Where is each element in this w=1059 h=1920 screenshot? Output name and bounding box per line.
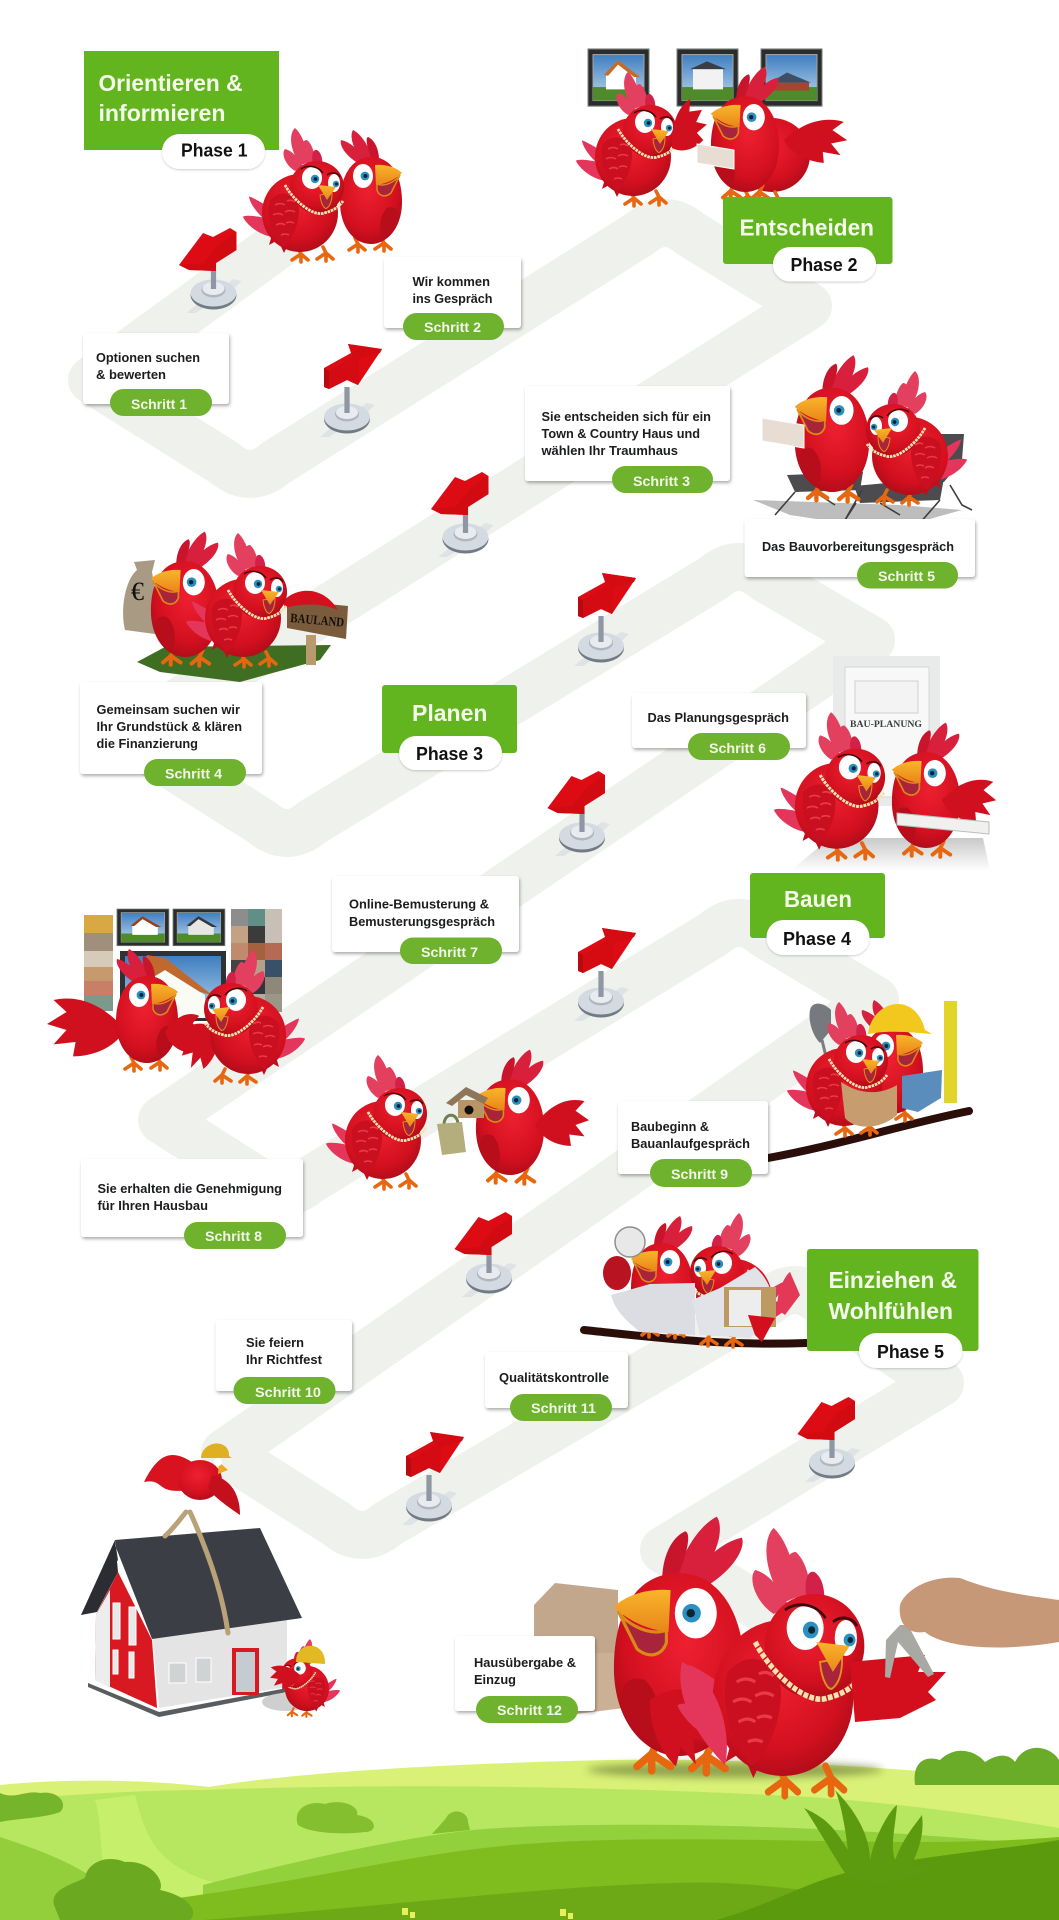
plan roll xyxy=(897,813,989,834)
door and birds xyxy=(774,656,998,871)
phase 5 header: Einziehen & xyxy=(828,1267,957,1293)
apron xyxy=(841,1082,897,1127)
step 6 card xyxy=(632,693,806,760)
phase pill: Phase 1 xyxy=(181,140,248,160)
sign 8 xyxy=(402,1432,464,1525)
step 2 card: Wir kommen xyxy=(412,274,490,289)
wing over sign xyxy=(284,591,338,610)
house photo frames xyxy=(588,49,822,106)
step 10 card: Ihr Richtfest xyxy=(246,1352,323,1367)
phase 2 header: Entscheiden xyxy=(740,214,874,240)
phase 5 header: Wohlfühlen xyxy=(828,1298,953,1324)
house roof xyxy=(81,1528,302,1639)
birds: phase 1 xyxy=(243,128,402,262)
phase 5 header xyxy=(807,1249,978,1368)
birds with money bag and Bauland sign xyxy=(123,532,348,682)
male bird xyxy=(614,1517,744,1773)
step 7 card: Online-Bemusterung & xyxy=(349,896,489,912)
tail xyxy=(777,1272,800,1315)
step 4 card: Schritt 4 xyxy=(165,766,223,782)
flowers xyxy=(402,1908,573,1919)
phase pill xyxy=(859,1333,962,1368)
birdhouse xyxy=(446,1087,488,1118)
money bag xyxy=(123,560,156,634)
phase pill: Phase 2 xyxy=(790,255,858,275)
phase pill: Phase 5 xyxy=(877,1342,944,1362)
step 12 card xyxy=(455,1636,595,1723)
sign 5 xyxy=(548,771,610,856)
grass tuft xyxy=(804,1790,936,1883)
sign xyxy=(306,635,316,665)
step 1 card xyxy=(83,333,229,416)
step 2 card: Schritt 2 xyxy=(424,320,481,335)
step 6 card: Schritt 6 xyxy=(709,741,767,756)
birds on chairs xyxy=(753,355,972,540)
house windows xyxy=(169,1658,211,1683)
step 8 card: für Ihren Hausbau xyxy=(98,1198,208,1213)
phase 2 header xyxy=(723,197,892,282)
step 2 card: ins Gespräch xyxy=(412,291,493,306)
step 11 card: Schritt 11 xyxy=(531,1401,597,1416)
step 3 card: Sie entscheiden sich für ein xyxy=(542,409,711,424)
shadow xyxy=(753,500,962,530)
step 9 card xyxy=(618,1101,768,1187)
step 3 card xyxy=(525,386,730,493)
step 12 card: Einzug xyxy=(474,1672,516,1687)
step 2 card xyxy=(384,257,521,340)
shovel xyxy=(809,1004,839,1111)
step 7 card: Schritt 7 xyxy=(421,945,478,960)
level xyxy=(944,1001,957,1103)
bush small xyxy=(432,1811,470,1834)
coats xyxy=(611,1283,695,1335)
door and birds: BAU-PLANUNG xyxy=(850,720,923,730)
material samples and birds xyxy=(47,909,305,1084)
step 3 card: wählen Ihr Traumhaus xyxy=(541,443,678,458)
phase pill xyxy=(773,247,876,282)
step 9 card: Schritt 9 xyxy=(671,1167,728,1182)
birds: phase 2 xyxy=(576,67,849,206)
step 9 card: Baubeginn & xyxy=(631,1119,709,1134)
small bird by house xyxy=(262,1639,340,1717)
sign 4 xyxy=(574,573,636,666)
birds with lock and birdhouse xyxy=(326,1050,589,1189)
step sign markers xyxy=(179,228,860,1525)
hard hat xyxy=(868,1004,932,1034)
chairs xyxy=(787,434,964,503)
photo card xyxy=(697,144,734,169)
step 5 card: Schritt 5 xyxy=(878,569,936,584)
clipboard xyxy=(724,1287,776,1327)
phase 4 header xyxy=(750,873,885,955)
step 8 card xyxy=(81,1159,303,1249)
boxes xyxy=(534,1583,618,1660)
female bird xyxy=(678,1528,864,1796)
flying bird with hard hat xyxy=(144,1443,240,1515)
magnifier xyxy=(615,1227,645,1257)
step 9 card: Bauanlaufgespräch xyxy=(631,1136,750,1151)
sign 7 xyxy=(454,1212,517,1297)
sign 1 xyxy=(179,228,242,313)
hand xyxy=(603,1256,631,1290)
step 10 card: Schritt 10 xyxy=(255,1385,321,1400)
step 7 card xyxy=(332,876,519,964)
step 4 card xyxy=(80,682,262,786)
step 4 card: Ihr Grundstück & klären xyxy=(96,719,242,734)
bush bottom left xyxy=(53,1859,193,1920)
bush left xyxy=(0,1792,63,1822)
landscape xyxy=(0,1748,1059,1920)
phase 1 header xyxy=(84,51,279,169)
step 1 card: Optionen suchen xyxy=(96,350,200,365)
sign 9 xyxy=(798,1397,860,1482)
house walls xyxy=(95,1572,157,1708)
step 5 card xyxy=(744,519,975,588)
step 8 card: Schritt 8 xyxy=(205,1229,263,1244)
birds with money bag and Bauland sign: € xyxy=(131,577,144,606)
frames xyxy=(117,909,169,946)
step 3 card: Town & Country Haus und xyxy=(542,426,700,441)
step 5 card: Das Bauvorbereitungsgespräch xyxy=(762,539,954,554)
keys xyxy=(885,1625,934,1678)
step 12 card: Hausübergabe & xyxy=(474,1655,576,1670)
strips xyxy=(84,915,113,1011)
frame 1 xyxy=(588,49,649,106)
construction birds on branch xyxy=(768,1000,969,1158)
winding path xyxy=(92,205,940,1625)
house base xyxy=(88,1683,287,1717)
photo card xyxy=(762,418,804,448)
phase 3 header: Planen xyxy=(412,700,488,726)
left wing xyxy=(680,1662,727,1765)
rope xyxy=(165,1512,228,1633)
phase 1 header: Orientieren & xyxy=(98,70,242,96)
house with rope xyxy=(81,1512,302,1717)
final scene: birds with boxes and keys xyxy=(534,1517,1059,1796)
shadow xyxy=(790,838,990,871)
step 4 card: Gemeinsam suchen wir xyxy=(96,702,240,717)
step 6 card: Das Planungsgespräch xyxy=(648,710,789,725)
bush top right xyxy=(915,1748,1059,1785)
step 1 card: & bewerten xyxy=(96,367,166,382)
phase 4 header: Bauen xyxy=(784,886,852,912)
step 10 card xyxy=(216,1320,352,1404)
frame 2 xyxy=(677,49,738,106)
sign 2 xyxy=(320,344,382,437)
right wing xyxy=(850,1655,946,1722)
birds with money bag and Bauland sign: BAULAND xyxy=(290,610,345,630)
step 8 card: Sie erhalten die Genehmigung xyxy=(98,1181,282,1196)
frame 3 xyxy=(761,49,822,106)
jeans xyxy=(902,1070,942,1112)
bird shadow xyxy=(587,1762,883,1778)
hand xyxy=(900,1578,1059,1647)
phase 1 header: informieren xyxy=(98,100,226,126)
lock xyxy=(437,1115,466,1155)
phase pill xyxy=(162,134,265,169)
phase 3 header xyxy=(382,685,517,770)
sign 3 xyxy=(431,472,494,557)
step 11 card xyxy=(485,1352,628,1421)
step 3 card: Schritt 3 xyxy=(633,474,691,489)
phase pill: Phase 4 xyxy=(783,929,851,949)
step 10 card: Sie feiern xyxy=(246,1335,304,1350)
step 4 card: die Finanzierung xyxy=(96,736,198,751)
sign 6 xyxy=(574,928,636,1021)
step 11 card: Qualitätskontrolle xyxy=(499,1370,609,1385)
bush centre xyxy=(297,1802,374,1833)
grass xyxy=(137,645,331,682)
door xyxy=(833,656,940,806)
phase pill: Phase 3 xyxy=(416,744,483,764)
tile samples xyxy=(231,909,282,1012)
step 7 card: Bemusterungsgespräch xyxy=(349,914,495,929)
inspector birds on branch xyxy=(584,1213,807,1347)
step 12 card: Schritt 12 xyxy=(497,1703,562,1718)
step 1 card: Schritt 1 xyxy=(131,397,188,412)
